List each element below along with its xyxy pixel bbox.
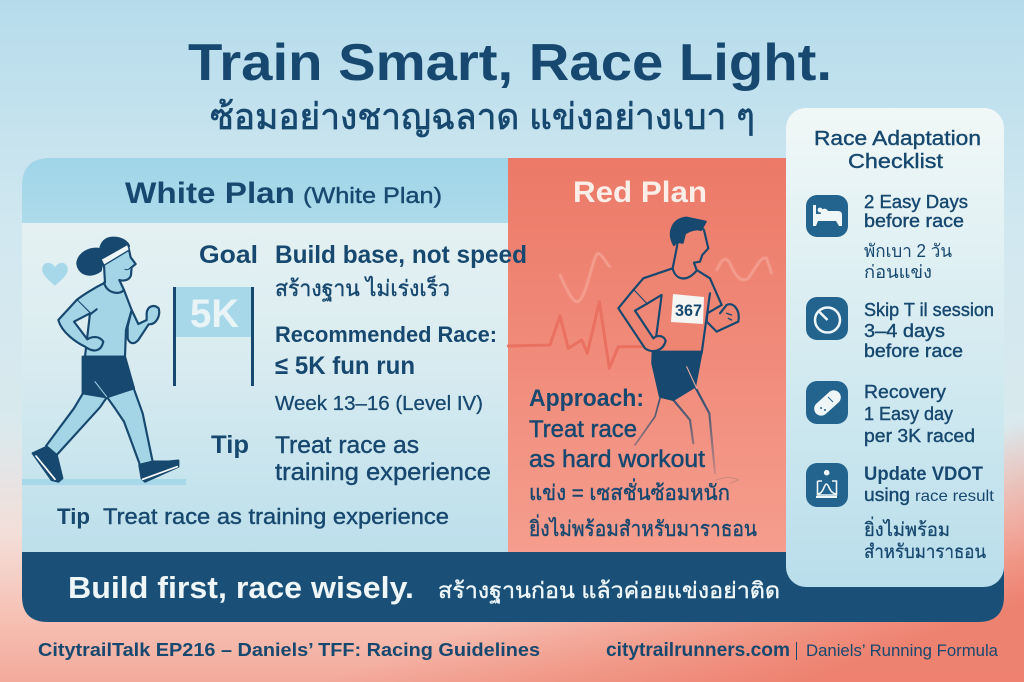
thai approach text: แข่ง = เซสชั่นซ้อมหนัก <box>529 478 730 505</box>
checklist heading: Race Adaptation <box>814 127 981 150</box>
checklist item 3: per 3K raced <box>864 426 975 446</box>
checklist item 1 <box>864 192 968 282</box>
thai approach text <box>529 478 757 541</box>
checklist item 4: ยิ่งไม่พร้อม <box>864 516 950 541</box>
ground bar <box>22 479 186 485</box>
tip label: Tip <box>211 431 249 459</box>
checklist item 4 <box>864 464 995 563</box>
checklist item 2: before race <box>864 341 963 361</box>
recommended race <box>275 322 497 415</box>
goal label: Goal <box>199 241 258 269</box>
tip text <box>275 432 491 486</box>
footer right credit: Daniels’ Running Formula <box>806 641 999 660</box>
bottom banner <box>22 552 1004 622</box>
heartbeat line <box>508 253 772 368</box>
goal text <box>275 241 527 302</box>
checklist item 2: Skip T il session <box>864 300 994 320</box>
checklist item 1: พักเบา 2 วัน <box>864 241 952 261</box>
approach text: as hard workout <box>529 446 705 473</box>
white plan header band <box>22 158 508 223</box>
goal text: Build base, not speed <box>275 241 527 269</box>
thai subtitle: ซ้อมอย่างชาญฉลาด แข่งอย่างเบา ๆ <box>210 96 755 137</box>
icon: male runner <box>618 218 739 483</box>
checklist item 3 <box>864 382 975 446</box>
icon: woman runner <box>33 238 178 482</box>
checklist item 3: 1 Easy day <box>864 404 953 424</box>
checklist item 1: before race <box>864 211 964 231</box>
banner headline: Build first, race wisely. <box>68 570 414 605</box>
checklist item 4: Update VDOT <box>864 464 983 485</box>
title: Train Smart, Race Light. <box>188 34 832 92</box>
icon: heart <box>42 263 68 286</box>
5K flag: 5K <box>190 292 239 336</box>
footer left credit: CitytrailTalk EP216 – Daniels’ TFF: Racing Guidelines <box>38 639 540 660</box>
banner thai text: สร้างฐานก่อน แล้วค่อยแข่งอย่าติด <box>438 578 780 604</box>
icon: bandage <box>806 381 848 424</box>
panel: white plan <box>22 158 508 552</box>
checklist item 2: 3–4 days <box>864 321 945 341</box>
white plan heading: White Plan <box>125 177 295 210</box>
checklist heading: Checklist <box>848 150 943 173</box>
recommended race: Week 13–16 (Level IV) <box>275 393 483 415</box>
white plan heading <box>125 177 442 210</box>
icon: timer <box>806 297 848 340</box>
goal text: สร้างฐาน ไม่เร่งเร็ว <box>275 274 450 302</box>
panel: red plan <box>508 158 786 552</box>
checklist item 4: using <box>864 485 910 505</box>
5K flag <box>173 287 254 386</box>
approach text: Treat race <box>529 416 637 443</box>
tip text: training experience <box>275 459 491 486</box>
approach text <box>529 385 705 473</box>
checklist heading <box>814 127 981 173</box>
panel: race adaptation checklist <box>786 108 1004 587</box>
race bib 367: 367 <box>675 301 702 320</box>
thai approach text: ยิ่งไม่พร้อมสำหรับมาราธอน <box>529 514 757 541</box>
icon: bed <box>806 195 848 237</box>
bottom tip line: Tip <box>57 504 90 529</box>
checklist item 3: Recovery <box>864 382 946 402</box>
recommended race: Recommended Race: <box>275 322 497 347</box>
bottom tip line: Treat race as training experience <box>103 504 449 529</box>
checklist item 4: race result <box>915 488 995 505</box>
red plan heading: Red Plan <box>573 176 707 209</box>
footer right credit: citytrailrunners.com <box>606 640 790 661</box>
checklist item 1: 2 Easy Days <box>864 192 968 212</box>
footer right credit <box>606 640 999 661</box>
recommended race: ≤ 5K fun run <box>275 352 415 380</box>
race bib 367 <box>671 294 704 324</box>
icon: vdot chart <box>806 463 848 507</box>
approach text: Approach: <box>529 385 644 412</box>
checklist item 1: ก่อนแข่ง <box>864 262 932 282</box>
checklist item 4: สำหรับมาราธอน <box>864 542 986 563</box>
tip text: Treat race as <box>275 432 419 459</box>
checklist item 2 <box>864 300 994 361</box>
white plan heading: (White Plan) <box>303 183 442 208</box>
